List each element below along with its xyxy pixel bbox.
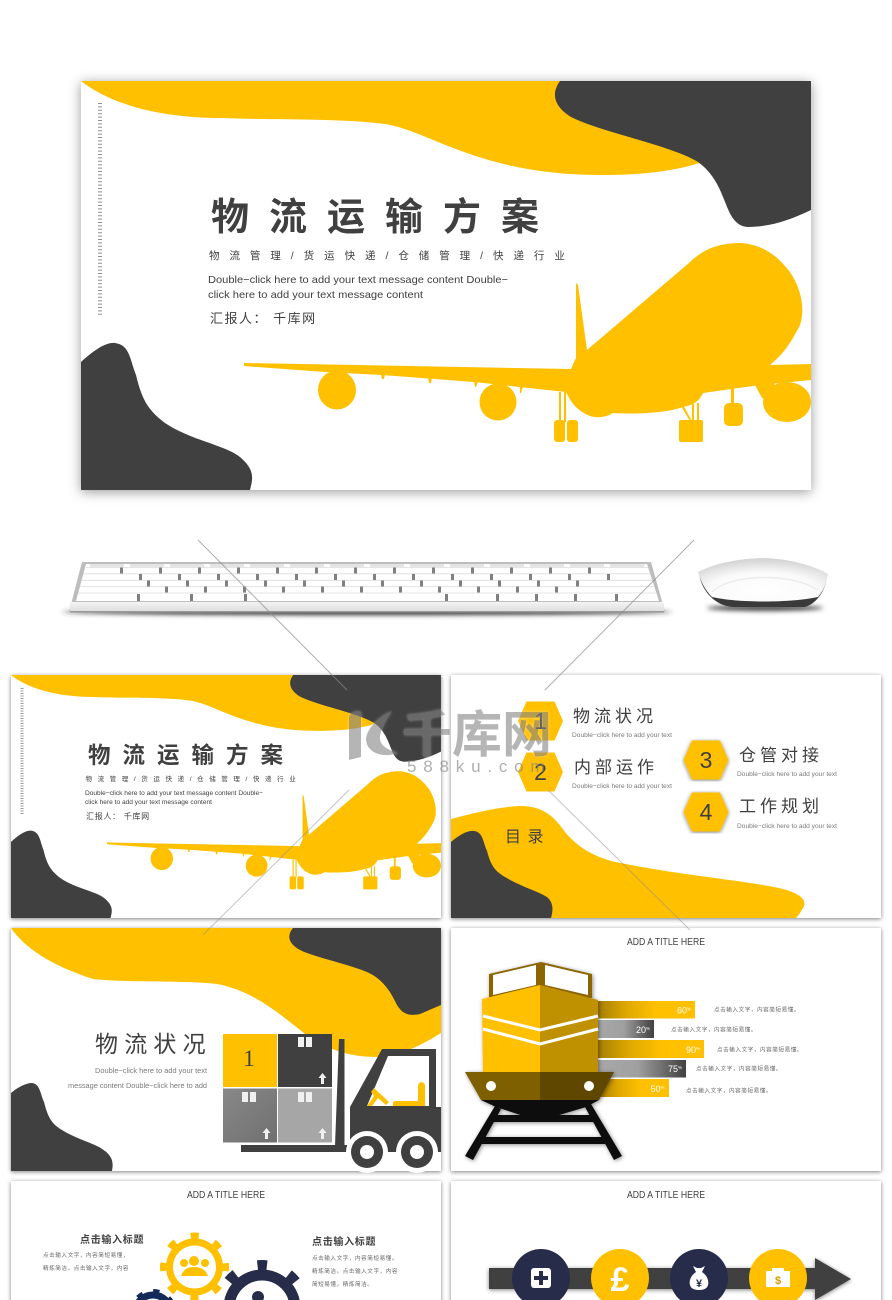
item 2 text: Double−click here to add your text — [572, 783, 672, 790]
item 3 text — [737, 746, 837, 778]
cab roof and windows — [489, 962, 592, 998]
cover description: Double−click here to add your text message content Double− — [208, 274, 508, 286]
item 4 text: Double−click here to add your text — [737, 823, 837, 830]
panel: train chart slide — [451, 928, 881, 1171]
circle 4: briefcase icon — [749, 1249, 807, 1300]
section description — [68, 1066, 208, 1090]
railway track — [465, 1104, 622, 1160]
hexagon 1: 1 — [534, 708, 547, 734]
watermark name: 千库网 — [402, 707, 552, 763]
thumbnail description: click here to add your text message content — [85, 799, 212, 806]
wheel left — [346, 1131, 388, 1173]
left text block: 点击输入标题 — [80, 1233, 144, 1246]
yellow gear — [164, 1236, 225, 1298]
cover reporter line: 汇报人： 千库网 — [210, 311, 317, 326]
stacked boxes — [223, 1034, 332, 1142]
item 4 text — [737, 797, 837, 830]
locomotive base — [465, 1072, 540, 1100]
cover subtitle: 物流管理/货运快递/仓储管理/快递行业 — [209, 249, 575, 262]
hexagon 1 — [518, 702, 563, 740]
bar 90%: 90 — [686, 1045, 696, 1055]
bar 50%: % — [660, 1085, 664, 1090]
right text block: 点击输入文字，内容简短易懂。 — [312, 1254, 398, 1262]
bar 60% — [598, 1001, 800, 1018]
section heading: 物流状况 — [95, 1031, 212, 1057]
bar 75%: 75 — [668, 1064, 678, 1074]
contents dark blob — [451, 831, 552, 918]
progress bars — [598, 1001, 803, 1097]
bar 20%: % — [646, 1026, 650, 1031]
panel: cover slide thumbnail — [11, 675, 441, 918]
bar 50% — [598, 1079, 772, 1097]
bar 20%: 点击输入文字，内容简短易懂。 — [671, 1026, 757, 1034]
circle 3: money bag icon: ¥ — [696, 1278, 703, 1290]
train illustration — [465, 962, 622, 1160]
cover title: 物流运输方案 — [211, 197, 559, 239]
panel: gears slide — [11, 1181, 441, 1300]
right text block: 点击输入标题 — [312, 1235, 376, 1248]
slide title: ADD A TITLE HERE — [187, 1190, 265, 1201]
circle 3: money bag icon — [670, 1249, 728, 1300]
section description: message content Double−click here to add — [68, 1081, 207, 1090]
item 1 text: Double−click here to add your text — [572, 732, 672, 739]
hatch decoration — [98, 103, 102, 315]
hexagon 3 — [684, 740, 728, 780]
right text block: 简短易懂。精炼简洁。 — [312, 1280, 373, 1288]
item 1 text — [572, 707, 672, 739]
thumbnail reporter: 汇报人： 千库网 — [86, 811, 150, 821]
body stripes — [483, 1016, 598, 1044]
mouse illustration — [698, 558, 828, 611]
right text block — [312, 1235, 398, 1288]
box 2 — [278, 1034, 332, 1087]
panel: arrow timeline slide — [451, 1181, 881, 1300]
contents yellow blob — [451, 806, 804, 918]
panel: contents slide — [451, 675, 881, 918]
hexagon 2 — [518, 752, 563, 792]
thumbnail description: Double−click here to add your text message content Double− — [85, 790, 263, 797]
bar 60%: 点击输入文字，内容简短易懂。 — [714, 1006, 800, 1014]
dark top blob — [289, 928, 441, 1015]
hexagon 3: 3 — [700, 747, 712, 773]
bar 60%: 60 — [677, 1006, 687, 1016]
circle 2: pound icon: £ — [611, 1261, 630, 1299]
contents heading: 目录 — [505, 828, 550, 846]
item 3 text: 仓管对接 — [739, 746, 823, 765]
box 4 — [278, 1088, 332, 1142]
wheel right — [396, 1131, 438, 1173]
slide title: ADD A TITLE HERE — [627, 1190, 705, 1201]
item 4 text: 工作规划 — [739, 797, 823, 816]
locomotive body — [482, 985, 540, 1072]
item 1 text: 物流状况 — [573, 707, 657, 726]
item 3 text: Double−click here to add your text — [737, 771, 837, 778]
bar 60%: % — [687, 1006, 691, 1012]
panel: main cover slide — [81, 81, 811, 490]
small navy gear — [132, 1292, 174, 1300]
bar 50%: 50 — [650, 1084, 660, 1094]
bar 90% — [598, 1040, 803, 1058]
bar 20%: 20 — [636, 1025, 646, 1035]
thumbnail title: 物流运输方案 — [88, 742, 295, 768]
thumbnail artwork — [11, 675, 441, 918]
cover artwork: blobs and airplane silhouette — [81, 81, 811, 490]
left text block: 点击输入文字，内容简短易懂， — [43, 1251, 129, 1259]
icon: people — [180, 1256, 209, 1276]
hexagon 2: 2 — [534, 759, 547, 785]
keyboard illustration — [62, 562, 672, 615]
watermark — [349, 707, 552, 776]
circle 1: plus icon — [512, 1249, 570, 1300]
yellow blob — [11, 928, 441, 1057]
item 2 text: 内部运作 — [574, 758, 658, 777]
bar 75% — [598, 1060, 782, 1078]
circle 4: briefcase icon: $ — [775, 1275, 781, 1287]
cover description: click here to add your text message content — [208, 289, 423, 301]
timeline arrow — [489, 1258, 851, 1300]
panel: logistics status slide — [11, 928, 441, 1173]
watermark url: 588ku.com — [407, 757, 551, 776]
right text block: 精炼简洁。点击输入文字，内容 — [312, 1267, 398, 1275]
watermark logo — [349, 711, 398, 760]
navy gear — [219, 1265, 305, 1300]
bar 90%: 点击输入文字，内容简短易懂。 — [717, 1046, 803, 1054]
dark bottom blob — [11, 1083, 113, 1171]
hatch decoration — [20, 688, 24, 814]
section description: Double−click here to add your text — [95, 1066, 208, 1075]
box 3 — [223, 1088, 277, 1142]
item 2 text — [572, 758, 672, 790]
diagonal reflection lines — [198, 540, 694, 935]
left text block: 精炼简洁。点击输入文字，内容 — [43, 1264, 129, 1272]
left text block — [43, 1233, 144, 1272]
cover description — [208, 274, 508, 301]
thumbnail description — [85, 790, 263, 806]
box 1: 1 — [243, 1046, 255, 1071]
cow catcher — [481, 1100, 599, 1121]
slide title: ADD A TITLE HERE — [627, 937, 705, 948]
bar 75%: % — [678, 1065, 682, 1070]
circle 2: pound icon — [591, 1249, 649, 1300]
forklift — [241, 1039, 441, 1173]
hexagon 4 — [684, 792, 728, 832]
thumbnail subtitle: 物流管理/货运快递/仓储管理/快递行业 — [86, 774, 301, 783]
hexagon 4: 4 — [700, 799, 713, 825]
bar 90%: % — [696, 1046, 700, 1051]
bar 50%: 点击输入文字，内容简短易懂。 — [686, 1086, 772, 1094]
bar 75%: 点击输入文字，内容简短易懂。 — [696, 1064, 782, 1072]
bar 20% — [598, 1020, 757, 1038]
icon: person — [252, 1291, 264, 1300]
